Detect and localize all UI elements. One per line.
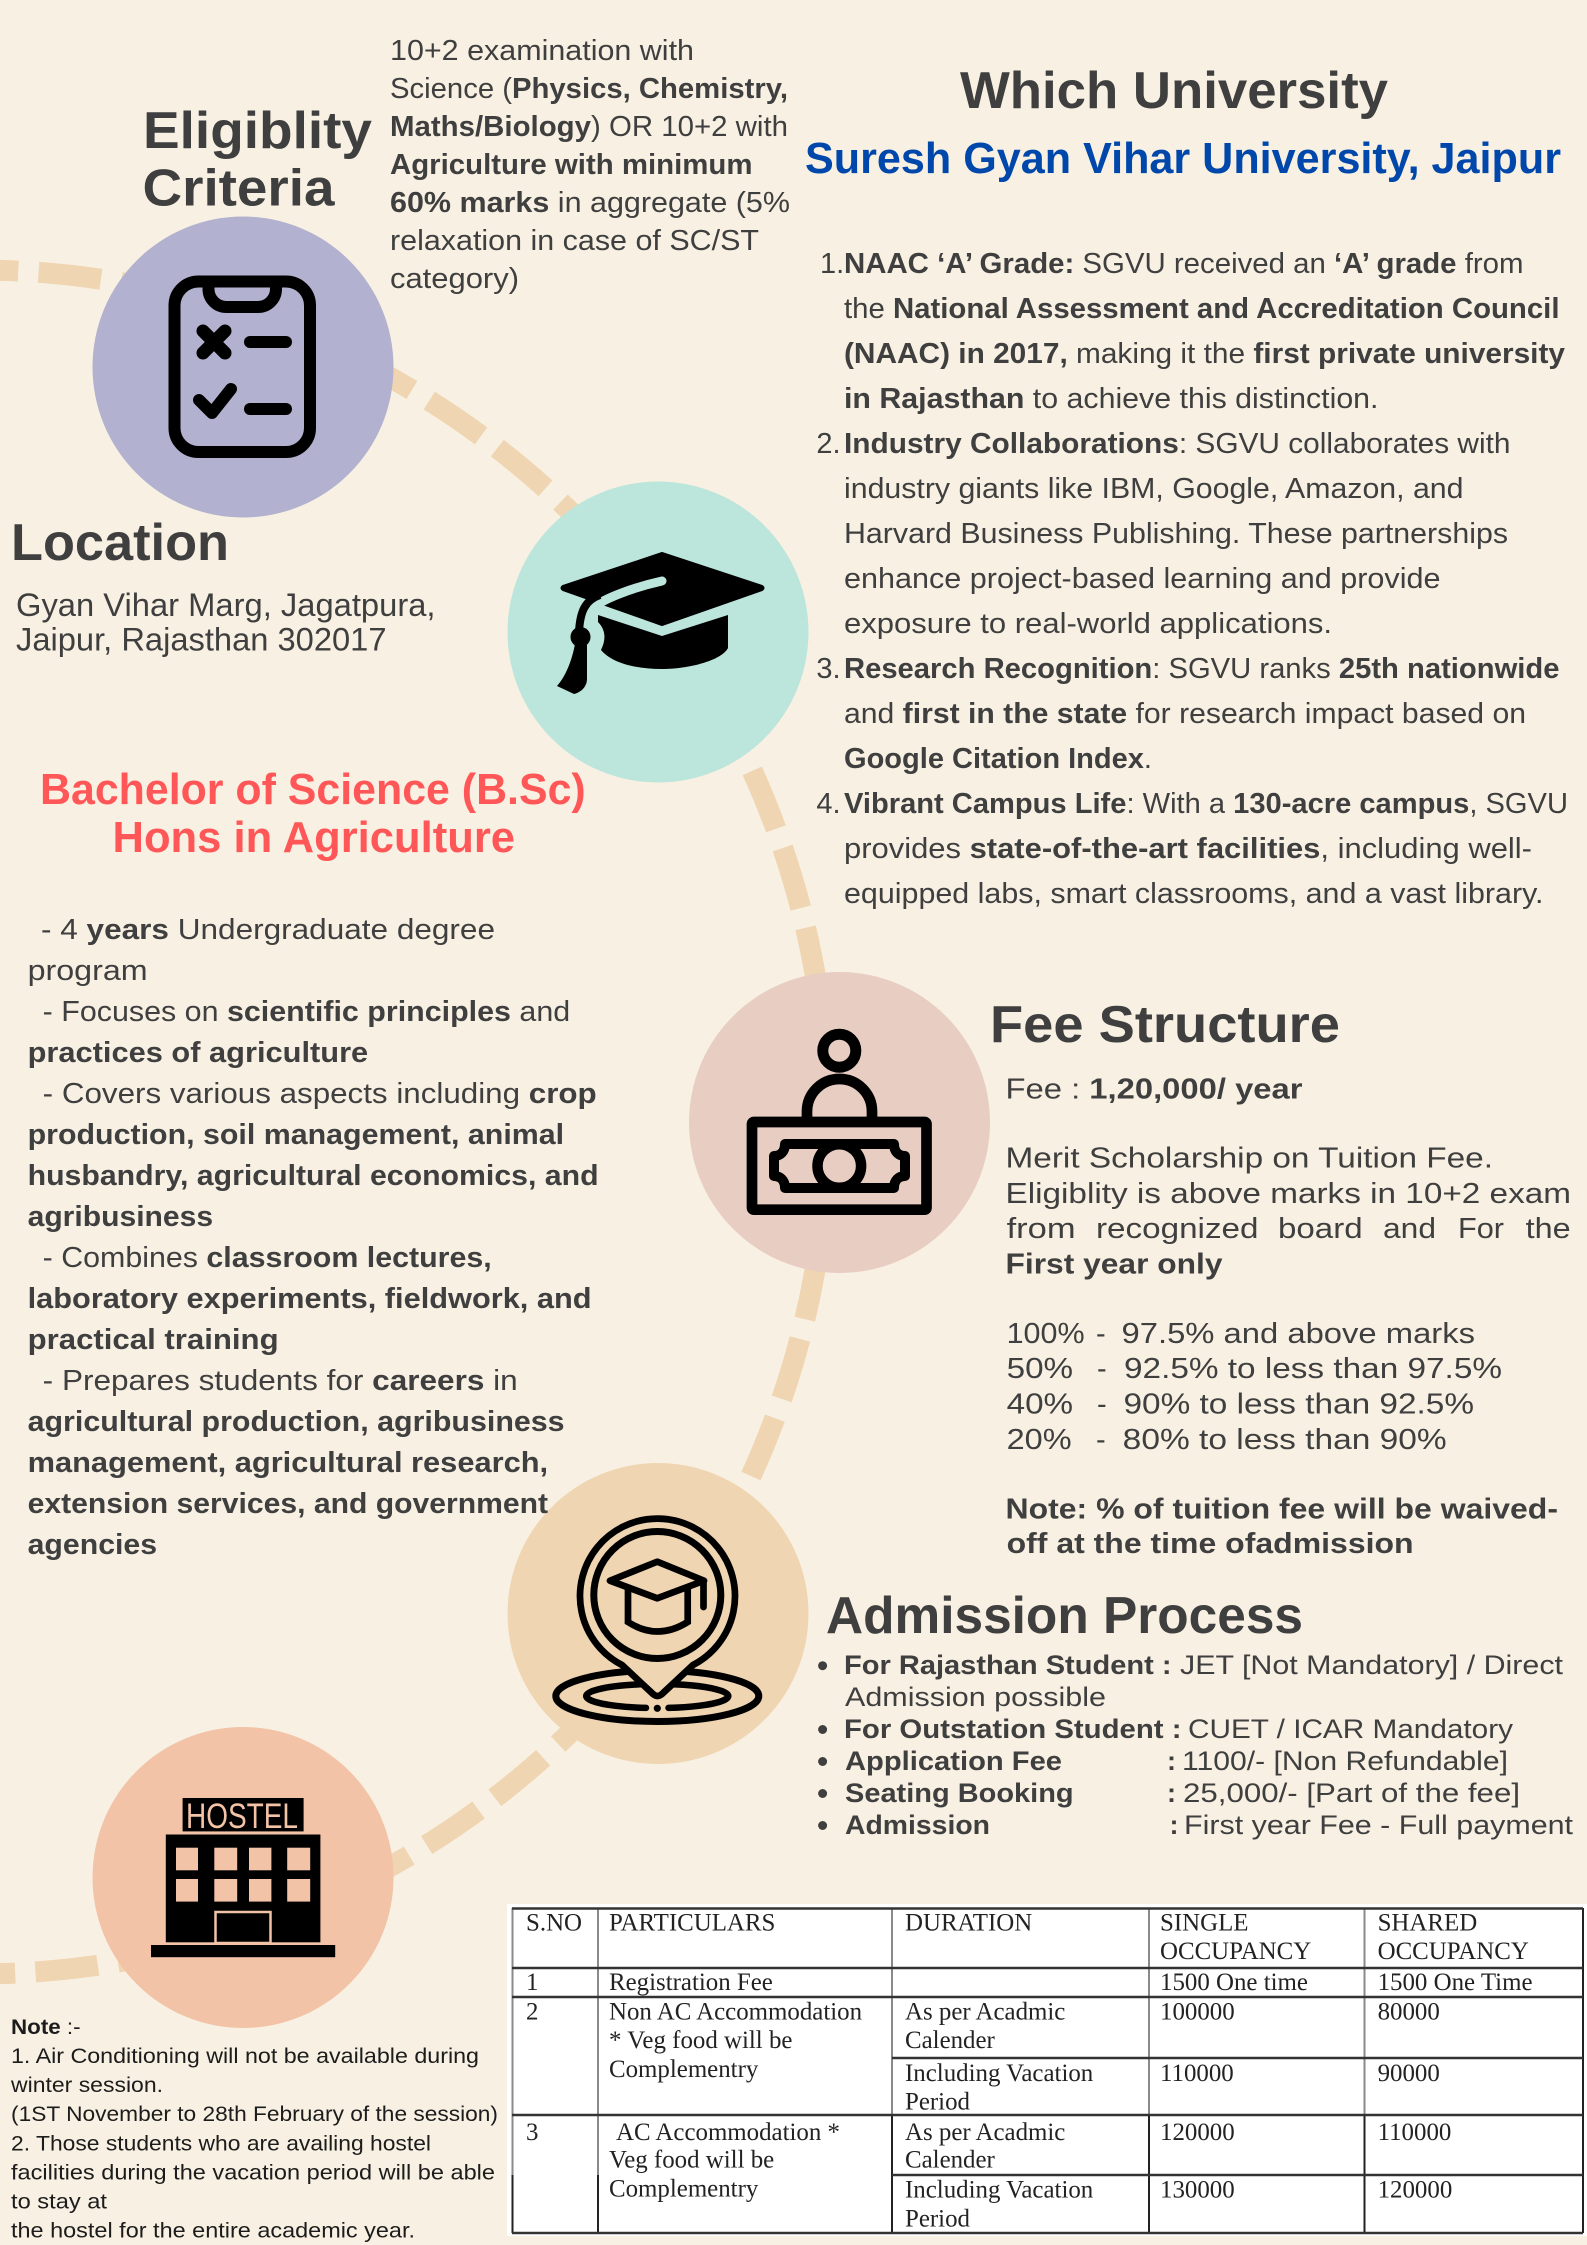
- list: university highlights: Industry Collaborations : SGVU collaborates with: [844, 428, 1510, 460]
- list: admission details: Application Fee: [845, 1746, 1062, 1776]
- list: admission details: Seating Booking: [845, 1778, 1074, 1808]
- table: hostel fees: Calender: [905, 2027, 996, 2054]
- panel: eligibility criteria: [92, 35, 790, 518]
- list: admission details: CUET / ICAR Mandatory: [1188, 1714, 1514, 1744]
- heading: programme name: Bachelor of Science (B.Sc): [40, 765, 586, 814]
- list: university highlights: in Rajasthan to achieve this distinction.: [844, 383, 1378, 415]
- text: tuition waiver note: [1006, 1494, 1558, 1560]
- list: university highlights: industry giants like IBM, Google, Amazon, and: [844, 473, 1464, 505]
- list: admission details: Admission possible: [845, 1682, 1106, 1712]
- table: hostel fees: 130000: [1160, 2176, 1235, 2204]
- list: university highlights: Research Recognition: SGVU ranks 25th nationwide: [844, 653, 1560, 685]
- panel: which university: [805, 62, 1568, 910]
- table: hostel fees: Non AC Accommodation: [609, 1998, 863, 2026]
- text: programme description: practical training: [28, 1324, 279, 1356]
- text: programme description: - Focuses on scientific principles and: [43, 996, 570, 1028]
- text: hostel notes: Note :-: [11, 2016, 81, 2039]
- table: hostel fees: Registration Fee: [609, 1969, 773, 1996]
- text: address: [16, 587, 436, 658]
- table: hostel fees: 1500 One Time: [1378, 1969, 1533, 1996]
- icon: hostel building: [92, 1727, 394, 2028]
- list: admission details: JET [Not Mandatory] / Direct: [1180, 1650, 1564, 1680]
- text: scholarship tiers: 97.5% and above marks: [1122, 1318, 1475, 1350]
- panel: bachelor of science programme: [28, 765, 599, 1561]
- table: hostel fees: OCCUPANCY: [1378, 1938, 1529, 1965]
- list: university highlights: NAAC ‘A’ Grade: SGVU received an ‘A’ grade from: [844, 248, 1524, 280]
- text: eligibility requirements: relaxation in case of SC/ST: [390, 225, 759, 257]
- text: scholarship tiers: 90% to less than 92.5%: [1124, 1388, 1474, 1420]
- table: hostel fees: 120000: [1378, 2176, 1452, 2204]
- text: programme description: - Combines classroom lectures,: [43, 1242, 492, 1274]
- text: eligibility requirements: 60% marks in aggregate (5%: [390, 187, 790, 219]
- text: hostel notes: 2. Those students who are availing hostel: [11, 2132, 431, 2156]
- text: programme description: management, agricultural research,: [28, 1447, 548, 1479]
- table: hostel fees: Veg food will be: [609, 2146, 774, 2174]
- list: university highlights: the National Assessment and Accreditation Council: [844, 293, 1560, 325]
- list: university highlights: 1.: [820, 248, 844, 280]
- table: hostel fees: As per Acadmic: [905, 1998, 1065, 2026]
- text: programme description: laboratory experiments, fieldwork, and: [28, 1283, 592, 1315]
- table: hostel fees: Complementry: [609, 2056, 759, 2083]
- table: hostel fees: 120000: [1160, 2119, 1235, 2146]
- list: university highlights: exposure to real-world applications.: [844, 608, 1332, 640]
- text: merit scholarship: [1006, 1142, 1571, 1280]
- text: programme description: [28, 914, 599, 1561]
- list: university highlights: [816, 248, 1568, 910]
- list: admission details: 1100/- [Non Refundable]: [1182, 1746, 1508, 1776]
- table: hostel fees: 90000: [1378, 2060, 1440, 2087]
- text: merit scholarship: Merit Scholarship on Tuition Fee.: [1006, 1142, 1493, 1174]
- text: eligibility requirements: Science (Physics, Chemistry,: [390, 73, 788, 105]
- text: hostel notes: 1. Air Conditioning will not be available during: [11, 2045, 479, 2068]
- table: hostel fees: 100000: [1160, 1998, 1235, 2026]
- text: merit scholarship: the: [1526, 1213, 1571, 1245]
- panel: fee structure: [990, 996, 1571, 1560]
- table: hostel fees: SINGLE: [1160, 1910, 1248, 1936]
- list: university highlights: (NAAC) in 2017, making it the first private university: [844, 338, 1565, 370]
- icon: fee payment person with banknote: [689, 972, 990, 1273]
- text: scholarship tiers: 20%: [1007, 1424, 1072, 1456]
- text: programme description: agribusiness: [28, 1201, 213, 1233]
- text: address: Gyan Vihar Marg, Jagatpura,: [16, 587, 436, 623]
- table: hostel fees: 110000: [1378, 2119, 1451, 2146]
- heading: programme name: Hons in Agriculture: [112, 813, 515, 862]
- text: merit scholarship: from: [1007, 1213, 1076, 1245]
- heading: which university: Which University: [960, 62, 1388, 120]
- table: hostel fees: Including Vacation: [905, 2060, 1094, 2087]
- table: hostel fees: Including Vacation: [905, 2176, 1094, 2204]
- table: hostel fees: 3: [526, 2119, 538, 2146]
- list: university highlights: Harvard Business Publishing. These partnerships: [844, 518, 1508, 550]
- text: programme description: production, soil management, animal: [28, 1119, 564, 1151]
- table: hostel fees: AC Accommodation *: [616, 2119, 840, 2146]
- text: hostel notes: (1ST November to 28th February of the session): [11, 2103, 498, 2126]
- text: scholarship tiers: [1007, 1318, 1502, 1456]
- text: hostel notes: the hostel for the entire academic year.: [11, 2220, 415, 2242]
- text: scholarship tiers: -: [1096, 1424, 1106, 1456]
- heading: location: Location: [11, 514, 229, 572]
- table: hostel fees: 1500 One time: [1160, 1969, 1308, 1996]
- text: scholarship tiers: 50%: [1007, 1353, 1073, 1385]
- table: hostel fees: PARTICULARS: [609, 1910, 775, 1936]
- table: hostel fees: 2: [526, 1998, 538, 2026]
- table: hostel fees: DURATION: [905, 1910, 1032, 1936]
- table: hostel fees: 80000: [1378, 1998, 1440, 2026]
- text: scholarship tiers: -: [1097, 1353, 1107, 1385]
- text: hostel notes: to stay at: [11, 2190, 107, 2214]
- text: programme description: extension services, and government: [28, 1488, 548, 1520]
- list: university highlights: 4.: [816, 788, 841, 820]
- list: university highlights: enhance project-based learning and provide: [844, 563, 1440, 595]
- text: merit scholarship: Eligiblity is above marks in 10+2 exam: [1006, 1178, 1571, 1210]
- text: annual fee: Fee : 1,20,000/ year: [1006, 1074, 1302, 1106]
- heading: eligibility criteria: [142, 102, 372, 218]
- text: eligibility requirements: [390, 35, 790, 295]
- table: hostel fees: Calender: [905, 2146, 996, 2174]
- table: hostel fees: OCCUPANCY: [1160, 1938, 1311, 1965]
- list: university highlights: Vibrant Campus Life: With a 130-acre campus, SGVU: [844, 788, 1568, 820]
- text: eligibility requirements: category): [390, 263, 519, 295]
- text: eligibility requirements: 10+2 examination with: [390, 35, 694, 67]
- list: admission details: Admission: [845, 1810, 990, 1840]
- text: eligibility requirements: Agriculture with minimum: [390, 149, 752, 181]
- text: merit scholarship: First year only: [1006, 1248, 1222, 1280]
- text: programme description: husbandry, agricultural economics, and: [28, 1160, 599, 1192]
- panel: location: [11, 514, 436, 658]
- text: programme description: - 4 years Undergraduate degree: [41, 914, 495, 946]
- text: merit scholarship: For: [1458, 1213, 1504, 1245]
- icon: location pin with graduation cap: [508, 1463, 808, 1764]
- list: admission details: :: [1167, 1778, 1176, 1808]
- list: admission details: :: [1167, 1746, 1176, 1776]
- table: hostel fees: Period: [905, 2206, 971, 2232]
- text: programme description: - Covers various aspects including crop: [43, 1078, 597, 1110]
- table: hostel fees: Complementry: [609, 2176, 759, 2202]
- text: programme description: - Prepares students for careers in: [43, 1365, 518, 1397]
- heading: eligibility criteria: Criteria: [142, 160, 336, 218]
- text: hostel notes: [10, 2016, 498, 2242]
- dashed connecting arc: [0, 270, 828, 1974]
- text: scholarship tiers: 100%: [1007, 1318, 1085, 1350]
- text: merit scholarship: recognized: [1096, 1213, 1258, 1245]
- list: university highlights: provides state-of-the-art facilities , including well-: [844, 833, 1532, 865]
- text: scholarship tiers: -: [1097, 1388, 1107, 1420]
- text: merit scholarship: and: [1383, 1213, 1436, 1245]
- heading: programme name: [40, 765, 586, 862]
- text: scholarship tiers: 80% to less than 90%: [1123, 1424, 1447, 1456]
- text: programme description: agencies: [28, 1529, 157, 1561]
- table: hostel fees: 1: [526, 1969, 538, 1996]
- table: hostel fees: * Veg food will be: [609, 2027, 792, 2054]
- heading: fee structure: Fee Structure: [990, 996, 1340, 1054]
- text: programme description: program: [28, 955, 148, 987]
- list: admission details: First year Fee - Full payment: [1184, 1810, 1574, 1840]
- text: scholarship tiers: -: [1096, 1318, 1106, 1350]
- text: tuition waiver note: Note: % of tuition fee will be waived-: [1006, 1494, 1558, 1526]
- heading: university name: Suresh Gyan Vihar University, Jaipur: [805, 134, 1561, 183]
- heading: admission process: Admission Process: [826, 1587, 1303, 1645]
- text: hostel notes: winter session.: [10, 2074, 163, 2097]
- heading: eligibility criteria: Eligiblity: [143, 102, 372, 160]
- text: scholarship tiers: 92.5% to less than 97.5%: [1124, 1353, 1502, 1385]
- list: university highlights: 3.: [816, 653, 841, 685]
- list: admission details: :: [1170, 1810, 1178, 1840]
- table: hostel fees: S.NO: [526, 1910, 582, 1936]
- text: tuition waiver note: off at the time ofadmission: [1007, 1528, 1414, 1560]
- text: address: Jaipur, Rajasthan 302017: [16, 622, 386, 658]
- table: hostel fees: SHARED: [1378, 1910, 1477, 1936]
- panel: admission process: [818, 1587, 1574, 1840]
- icon: hostel building: HOSTEL: [186, 1797, 298, 1836]
- table: hostel fees: 110000: [1160, 2060, 1234, 2087]
- list: admission details: For Rajasthan Student :: [844, 1650, 1172, 1680]
- icon: clipboard checklist: [92, 216, 394, 518]
- list: university highlights: equipped labs, smart classrooms, and a vast library.: [844, 878, 1544, 910]
- table: hostel fees: [507, 1904, 1587, 2236]
- list: university highlights: 2.: [816, 428, 841, 460]
- table: hostel fees: As per Acadmic: [905, 2119, 1065, 2146]
- list: university highlights: Google Citation Index.: [844, 743, 1152, 775]
- icon: graduation cap: [508, 482, 808, 782]
- list: admission details: [818, 1650, 1574, 1840]
- list: admission details: 25,000/- [Part of the fee]: [1183, 1778, 1520, 1808]
- list: admission details: For Outstation Student :: [844, 1714, 1182, 1744]
- table: hostel fees: Period: [905, 2088, 971, 2116]
- text: scholarship tiers: 40%: [1007, 1388, 1073, 1420]
- text: programme description: agricultural production, agribusiness: [28, 1406, 565, 1438]
- text: eligibility requirements: Maths/Biology) OR 10+2 with: [390, 111, 788, 143]
- text: hostel notes: facilities during the vacation period will be able: [11, 2162, 495, 2184]
- text: programme description: practices of agriculture: [28, 1037, 368, 1069]
- list: university highlights: and first in the state for research impact based on: [844, 698, 1526, 730]
- text: merit scholarship: board: [1278, 1213, 1363, 1245]
